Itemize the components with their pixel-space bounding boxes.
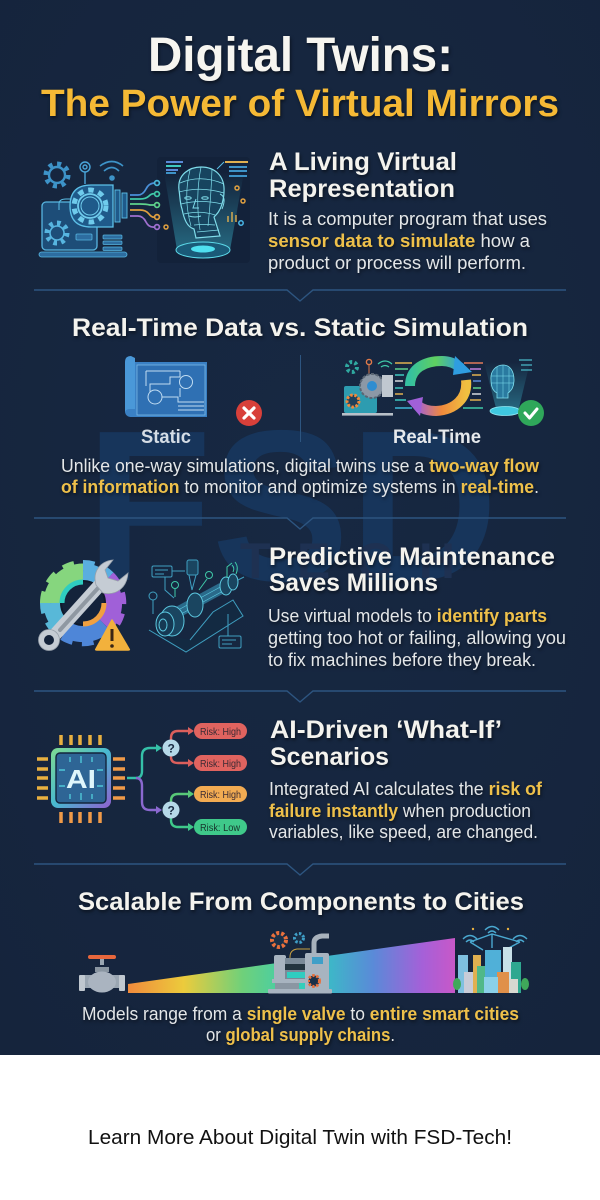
wifi symbol [100,162,123,180]
connector wires [130,181,159,229]
cycle arrows [410,361,466,411]
body text: Integrated AI calculates the risk of [269,779,543,799]
wrench [38,560,128,650]
heading [269,148,457,203]
warning triangle [96,620,129,650]
panel: scalable from components to cities [78,888,529,1045]
body text [82,1004,519,1045]
hologram head [484,360,532,416]
top gear [46,164,68,186]
gear housing [70,185,113,227]
panel: real-time data vs static simulation [61,314,544,497]
footer call to action: Learn More About Digital Twin with FSD-Tech! [88,1127,512,1149]
risk pills: Risk: Low [200,823,241,834]
icon: machine, cycle and digital head [342,356,544,426]
risk pills [194,723,247,835]
icon: machine to hologram blueprint [39,157,250,263]
icon: smart city [453,926,529,993]
green check [518,400,544,426]
heading [270,716,502,771]
chart: rainbow scale wedge [128,938,455,993]
question nodes [162,740,180,818]
panel: predictive maintenance [38,543,566,670]
real-time label: Real-Time [393,427,481,448]
body text [61,456,540,497]
body text: Use virtual models to identify parts [268,606,547,626]
icon: red x [236,400,262,426]
holographic platform [176,242,230,258]
risk pills: Risk: High [200,727,241,738]
wireframe machine [149,560,244,652]
body text: getting too hot or failing, allowing you [268,628,566,648]
body text: or global supply chains. [206,1025,395,1045]
heading: AI-Driven ‘What-If’ [270,716,502,744]
sensor pin [80,162,90,184]
data readouts [166,162,248,176]
laptop body [42,202,97,250]
body text: variables, like speed, are changed. [269,822,538,842]
icon: industrial machine [268,933,332,994]
heading: Scalable From Components to Cities [78,888,524,916]
risk pills: Risk: High [200,790,241,801]
heading: Saves Millions [269,569,438,597]
body text [268,209,547,273]
colourful machine [342,359,393,416]
chip body [51,748,111,808]
data lines [395,363,483,408]
chip label: AI [66,764,96,794]
risk pills: Risk: High [200,759,241,770]
heading: Predictive Maintenance [269,543,555,571]
title [41,29,559,125]
heading: A Living Virtual [269,148,457,176]
body text: It is a computer program that uses [268,209,547,229]
heading: Representation [269,175,455,203]
icon: valve [79,955,125,992]
body text: product or process will perform. [268,253,526,273]
wireframe head [179,167,224,238]
body text [269,779,543,842]
hologram cone [164,172,244,250]
icon: blueprint [125,356,207,417]
chip pins [37,735,125,823]
heading: Real-Time Data vs. Static Simulation [72,314,528,342]
branches [127,731,190,827]
heading: Scenarios [270,743,389,771]
panel: ai-driven what-if scenarios [37,716,543,842]
body text: Unlike one-way simulations, digital twins use a two-way flow [61,456,540,476]
panel: a living virtual representation [39,148,547,273]
title: The Power of Virtual Mirrors [41,83,559,125]
question nodes: ? [168,742,175,756]
body text: to fix machines before they break. [268,650,536,670]
body text [268,606,566,670]
body text: Models range from a single valve to entire smart cities [82,1004,519,1024]
icon: ai chip with risk decision tree [37,723,247,835]
icon: gear, wrench and warning [38,560,244,652]
question nodes: ? [168,804,175,818]
body text: failure instantly when production [269,801,531,821]
static label: Static [141,427,191,448]
title: Digital Twins: [148,29,453,82]
heading [269,543,555,597]
watermark: FSD Tech: TECH [240,533,455,589]
rainbow gear [45,565,121,641]
body text: sensor data to simulate how a [268,231,531,251]
watermark: FSD Tech: FSD [86,385,498,626]
body text: of information to monitor and optimize systems in real-time. [61,477,539,497]
